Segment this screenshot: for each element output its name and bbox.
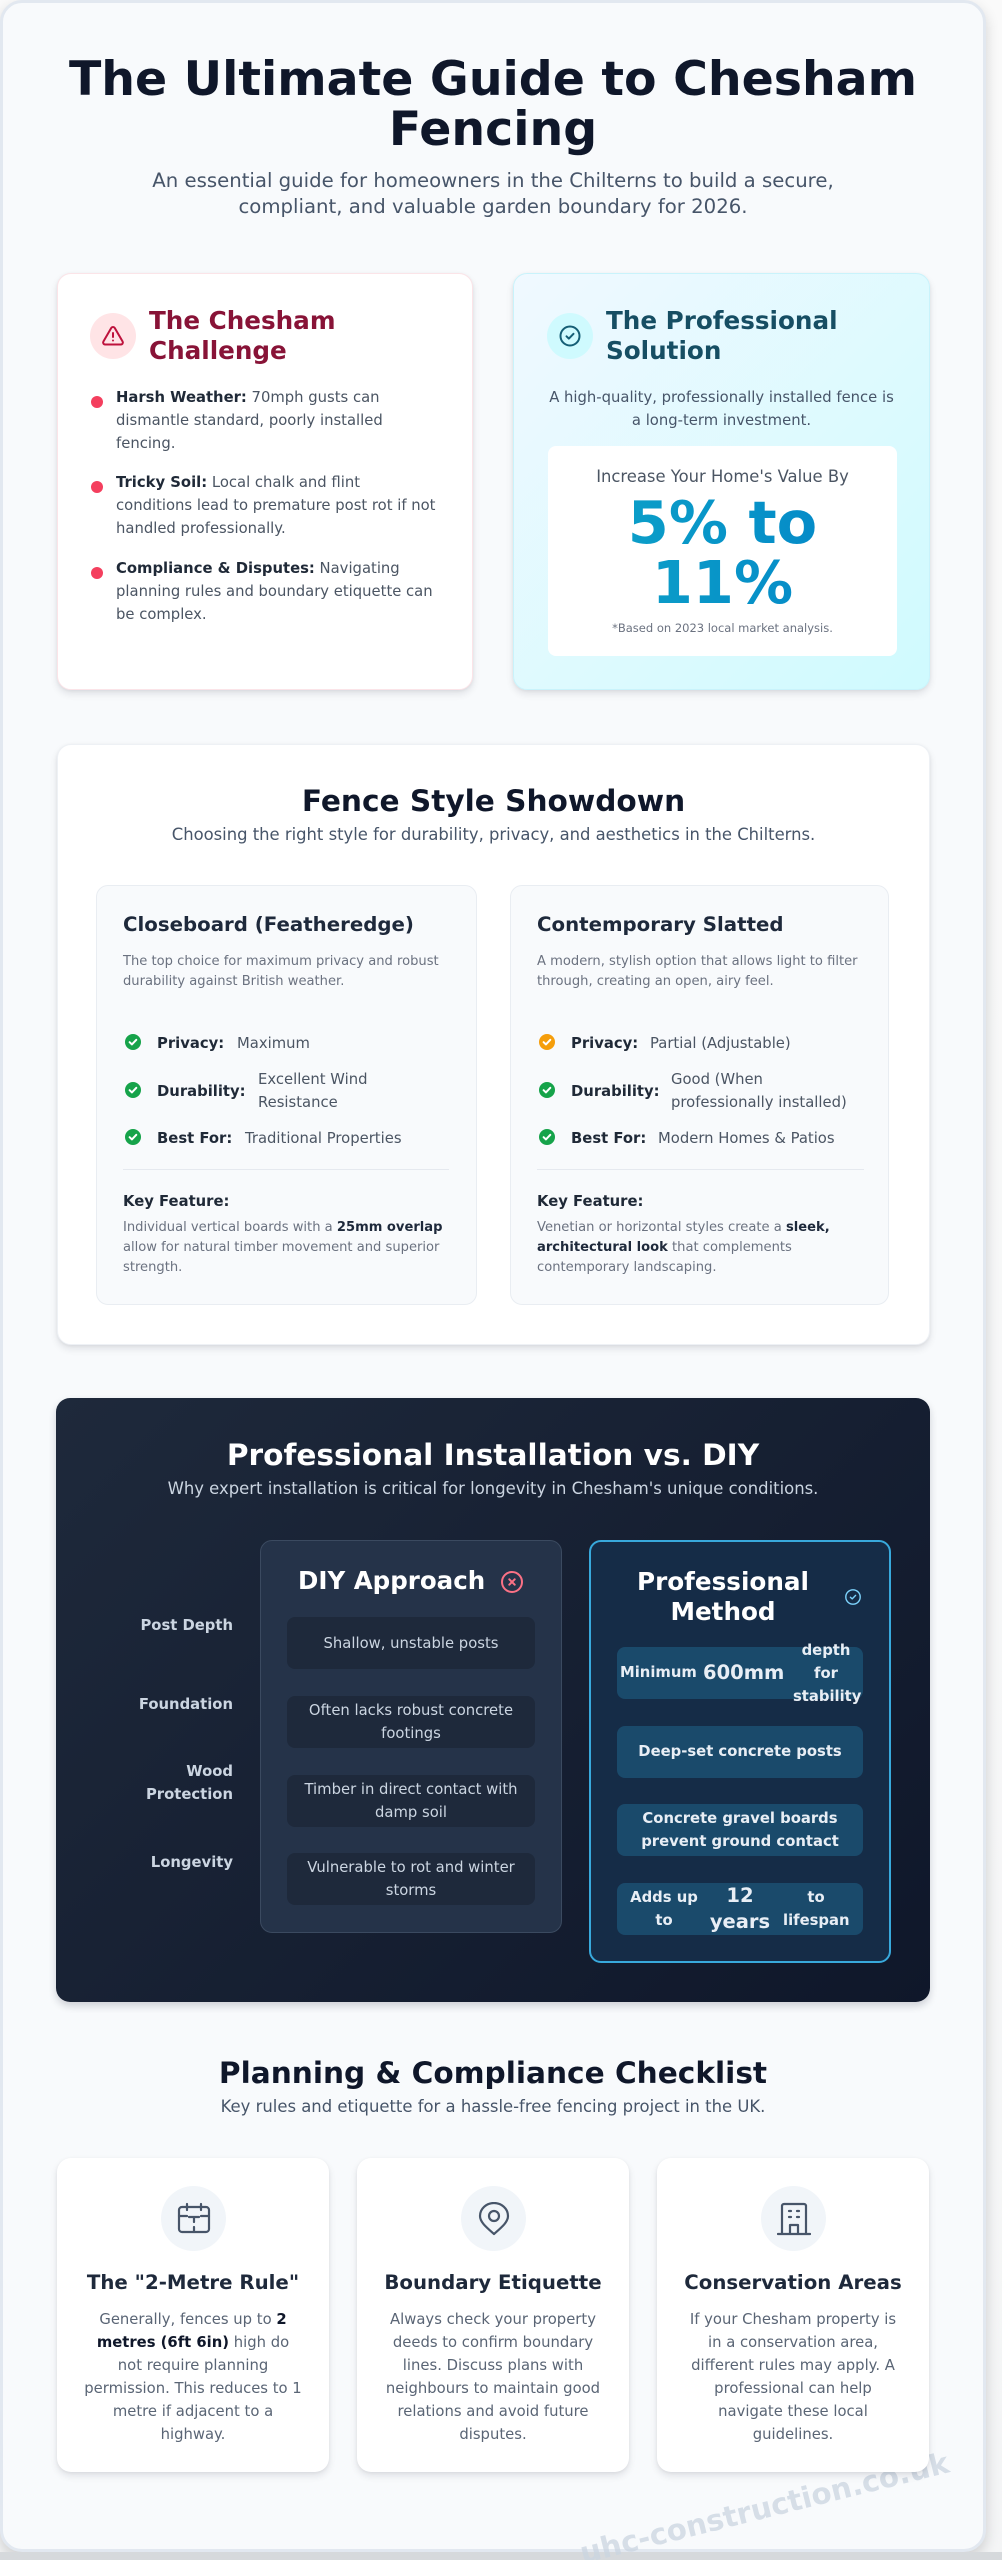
pro row: wood protection: prevent ground contact bbox=[641, 1833, 839, 1850]
card text: If your Chesham property is bbox=[690, 2311, 896, 2328]
row: durability: Durability: bbox=[157, 1083, 246, 1100]
stat number: 5% to bbox=[628, 488, 817, 557]
pro row: post depth: Minimum bbox=[620, 1664, 697, 1681]
icon: map pin bbox=[461, 2186, 526, 2251]
card text bbox=[690, 2311, 896, 2443]
row: best for: Modern Homes & Patios bbox=[658, 1130, 835, 1147]
key feature: Individual vertical boards with a 25mm overlap bbox=[123, 1220, 442, 1235]
row labels bbox=[139, 1617, 233, 1871]
pro row: wood protection: Concrete gravel boards bbox=[642, 1810, 838, 1827]
key feature: Key Feature: bbox=[537, 1193, 643, 1210]
row: privacy bbox=[125, 1034, 310, 1052]
pro row: post depth bbox=[617, 1647, 863, 1699]
bullet: harsh weather: dismantle standard, poorly installed bbox=[116, 412, 383, 429]
icon: building bbox=[761, 2186, 826, 2251]
professional heading: Method bbox=[670, 1597, 776, 1626]
DIY row: longevity: Vulnerable to rot and winter bbox=[307, 1859, 515, 1876]
card text bbox=[84, 2311, 302, 2443]
row: privacy: Maximum bbox=[237, 1035, 310, 1052]
bullet: compliance: Compliance & Disputes: Navigating bbox=[116, 560, 400, 577]
key feature: contemporary landscaping. bbox=[537, 1260, 717, 1275]
description: A modern, stylish option that allows light to filter bbox=[537, 954, 858, 969]
row labels: Foundation bbox=[139, 1696, 233, 1713]
pro row: longevity: Adds up bbox=[630, 1889, 698, 1906]
row: durability: Durability: bbox=[571, 1083, 660, 1100]
checklist heading: Planning & Compliance Checklist bbox=[219, 2056, 767, 2090]
card title: Contemporary Slatted bbox=[537, 913, 784, 936]
professional heading: Professional bbox=[637, 1567, 809, 1596]
heading: Challenge bbox=[149, 336, 287, 365]
card: contemporary slatted bbox=[510, 885, 889, 1305]
panel: professional method bbox=[589, 1540, 891, 1963]
panel: the professional solution bbox=[513, 273, 930, 690]
key feature bbox=[123, 1193, 442, 1275]
panel: the Chesham challenge bbox=[57, 273, 473, 690]
bullet: harsh weather bbox=[91, 389, 383, 452]
key feature: allow for natural timber movement and superior bbox=[123, 1240, 439, 1255]
heading: Solution bbox=[606, 336, 721, 365]
heading: The Chesham bbox=[149, 306, 336, 335]
key feature: Key Feature: bbox=[123, 1193, 229, 1210]
pro row: post depth: 600mm bbox=[703, 1661, 784, 1684]
card text: navigate these local bbox=[718, 2403, 868, 2420]
key feature: Venetian or horizontal styles create a sleek, bbox=[537, 1220, 830, 1235]
icon: warning bbox=[90, 313, 136, 359]
row: privacy: Privacy: bbox=[157, 1035, 224, 1052]
key feature: strength. bbox=[123, 1260, 182, 1275]
key feature bbox=[537, 1193, 830, 1275]
heading: Professional Installation vs. DIY bbox=[227, 1438, 759, 1472]
heading: Fence Style Showdown bbox=[302, 784, 685, 818]
description bbox=[122, 954, 439, 989]
card text: disputes. bbox=[459, 2426, 527, 2443]
description: The top choice for maximum privacy and robust bbox=[123, 954, 439, 969]
row: durability bbox=[125, 1071, 367, 1111]
pro row: post depth: stability bbox=[793, 1688, 861, 1705]
DIY row: wood protection: damp soil bbox=[375, 1804, 447, 1821]
bullet: harsh weather: Harsh Weather: 70mph gusts can bbox=[116, 389, 380, 406]
row: durability: Good (When bbox=[671, 1071, 763, 1088]
bullet: tricky soil: conditions lead to premature post rot if not bbox=[116, 497, 435, 514]
footnote: *Based on 2023 local market analysis. bbox=[612, 621, 833, 635]
row labels: Post Depth bbox=[140, 1617, 233, 1634]
card text: metres (6ft 6in) high do bbox=[97, 2334, 289, 2351]
DIY row: foundation: footings bbox=[381, 1725, 441, 1742]
title bbox=[69, 52, 917, 157]
professional heading bbox=[637, 1567, 809, 1626]
card title: The "2-Metre Rule" bbox=[87, 2271, 299, 2294]
bullet: harsh weather: fencing. bbox=[116, 435, 175, 452]
heading bbox=[606, 306, 838, 365]
DIY row: foundation bbox=[287, 1696, 535, 1748]
icon: DIY cross bbox=[501, 1571, 523, 1593]
bullet: compliance: be complex. bbox=[116, 606, 207, 623]
card title: Boundary Etiquette bbox=[384, 2271, 602, 2294]
card text: Always check your property bbox=[390, 2311, 596, 2328]
intro text bbox=[549, 389, 894, 429]
card text: guidelines. bbox=[753, 2426, 833, 2443]
card title: Closeboard (Featheredge) bbox=[123, 913, 414, 936]
row: durability: professionally installed) bbox=[671, 1094, 847, 1111]
icon: calendar bbox=[161, 2186, 226, 2251]
pro row: longevity: years bbox=[710, 1910, 770, 1933]
row: best for: Best For: bbox=[157, 1130, 232, 1147]
card: closeboard bbox=[96, 885, 477, 1305]
pro row: longevity: 12 bbox=[726, 1884, 754, 1907]
pro row: longevity: to bbox=[655, 1912, 673, 1929]
card text: different rules may apply. A bbox=[691, 2357, 895, 2374]
DIY row: foundation: Often lacks robust concrete bbox=[309, 1702, 513, 1719]
row: best for: Traditional Properties bbox=[245, 1130, 402, 1147]
card text: not require planning bbox=[118, 2357, 268, 2374]
intro text: a long-term investment. bbox=[632, 412, 811, 429]
DIY row: longevity: storms bbox=[386, 1882, 436, 1899]
intro text: A high-quality, professionally installed fence is bbox=[549, 389, 894, 406]
bullet: tricky soil: Tricky Soil: Local chalk and flint bbox=[116, 474, 360, 491]
stat label: Increase Your Home's Value By bbox=[596, 467, 849, 486]
row labels: Protection bbox=[146, 1786, 233, 1803]
card text: lines. Discuss plans with bbox=[403, 2357, 583, 2374]
stat number: 11% bbox=[652, 548, 793, 617]
DIY row: post depth bbox=[287, 1617, 535, 1669]
card text: professional can help bbox=[714, 2380, 872, 2397]
bullet: tricky soil: handled professionally. bbox=[116, 520, 286, 537]
panel: DIY approach bbox=[260, 1540, 562, 1933]
pro row: post depth: for bbox=[814, 1665, 838, 1682]
subtitle bbox=[152, 169, 834, 218]
pro row: wood protection bbox=[617, 1804, 863, 1856]
description bbox=[537, 954, 858, 989]
panel: installation comparison bbox=[56, 1398, 930, 2002]
subtitle: compliant, and valuable garden boundary for 2026. bbox=[238, 195, 748, 218]
DIY row: post depth: Shallow, unstable posts bbox=[324, 1634, 498, 1652]
heading: The Professional bbox=[606, 306, 838, 335]
card text bbox=[386, 2311, 600, 2443]
checklist subheading: Key rules and etiquette for a hassle-free fencing project in the UK. bbox=[221, 2097, 765, 2116]
bullet: compliance bbox=[91, 560, 433, 623]
row: privacy: Privacy: bbox=[571, 1035, 638, 1052]
card text: in a conservation area, bbox=[708, 2334, 878, 2351]
subtitle: An essential guide for homeowners in the Chilterns to build a secure, bbox=[152, 169, 834, 192]
value stat box bbox=[548, 446, 897, 656]
card text: deeds to confirm boundary bbox=[393, 2334, 593, 2351]
pro row: longevity: lifespan bbox=[783, 1912, 850, 1929]
icon: check circle bbox=[547, 313, 593, 359]
DIY row: wood protection bbox=[287, 1775, 535, 1827]
DIY heading: DIY Approach bbox=[298, 1566, 485, 1595]
DIY row: wood protection: Timber in direct contact with bbox=[304, 1781, 518, 1798]
row: privacy: Partial (Adjustable) bbox=[650, 1035, 791, 1052]
card text: relations and avoid future bbox=[397, 2403, 589, 2420]
card title: Conservation Areas bbox=[684, 2271, 902, 2294]
panel: fence style showdown bbox=[57, 744, 930, 1345]
description: durability against British weather. bbox=[123, 974, 344, 989]
row: best for: Best For: bbox=[571, 1130, 646, 1147]
card text: metre if adjacent to a bbox=[113, 2403, 273, 2420]
pro row: longevity: to bbox=[807, 1889, 825, 1906]
subheading: Choosing the right style for durability, privacy, and aesthetics in the Chilterns. bbox=[172, 825, 815, 844]
bullet: tricky soil bbox=[91, 474, 436, 537]
pro row: foundation: Deep-set concrete posts bbox=[638, 1743, 842, 1760]
card: boundary etiquette bbox=[357, 2158, 629, 2472]
pro row: longevity bbox=[617, 1883, 863, 1935]
row: best for bbox=[539, 1129, 835, 1147]
row labels: Wood bbox=[186, 1763, 233, 1780]
card text: neighbours to maintain good bbox=[386, 2380, 600, 2397]
key feature: architectural look that complements bbox=[537, 1240, 792, 1255]
row: privacy bbox=[539, 1034, 791, 1052]
title: Fencing bbox=[389, 102, 597, 157]
description: through, creating an open, airy feel. bbox=[537, 974, 774, 989]
pro row: foundation bbox=[617, 1726, 863, 1778]
row: best for bbox=[125, 1129, 402, 1147]
row: durability: Excellent Wind bbox=[258, 1071, 367, 1088]
title: The Ultimate Guide to Chesham bbox=[69, 52, 917, 107]
stat number bbox=[548, 493, 897, 613]
row: durability: Resistance bbox=[258, 1094, 338, 1111]
subheading: Why expert installation is critical for longevity in Chesham's unique conditions. bbox=[168, 1479, 818, 1498]
card text: highway. bbox=[161, 2426, 225, 2443]
DIY row: longevity bbox=[287, 1853, 535, 1905]
pro row: post depth: depth bbox=[802, 1642, 850, 1659]
card: conservation areas bbox=[657, 2158, 929, 2472]
heading bbox=[149, 306, 336, 365]
icon: professional check bbox=[845, 1589, 861, 1605]
card: 2-metre rule bbox=[57, 2158, 329, 2472]
card text: Generally, fences up to 2 bbox=[99, 2311, 287, 2328]
row labels: Longevity bbox=[151, 1854, 233, 1871]
bullet: compliance: planning rules and boundary etiquette can bbox=[116, 583, 433, 600]
card text: permission. This reduces to 1 bbox=[84, 2380, 302, 2397]
row: durability bbox=[539, 1071, 847, 1111]
